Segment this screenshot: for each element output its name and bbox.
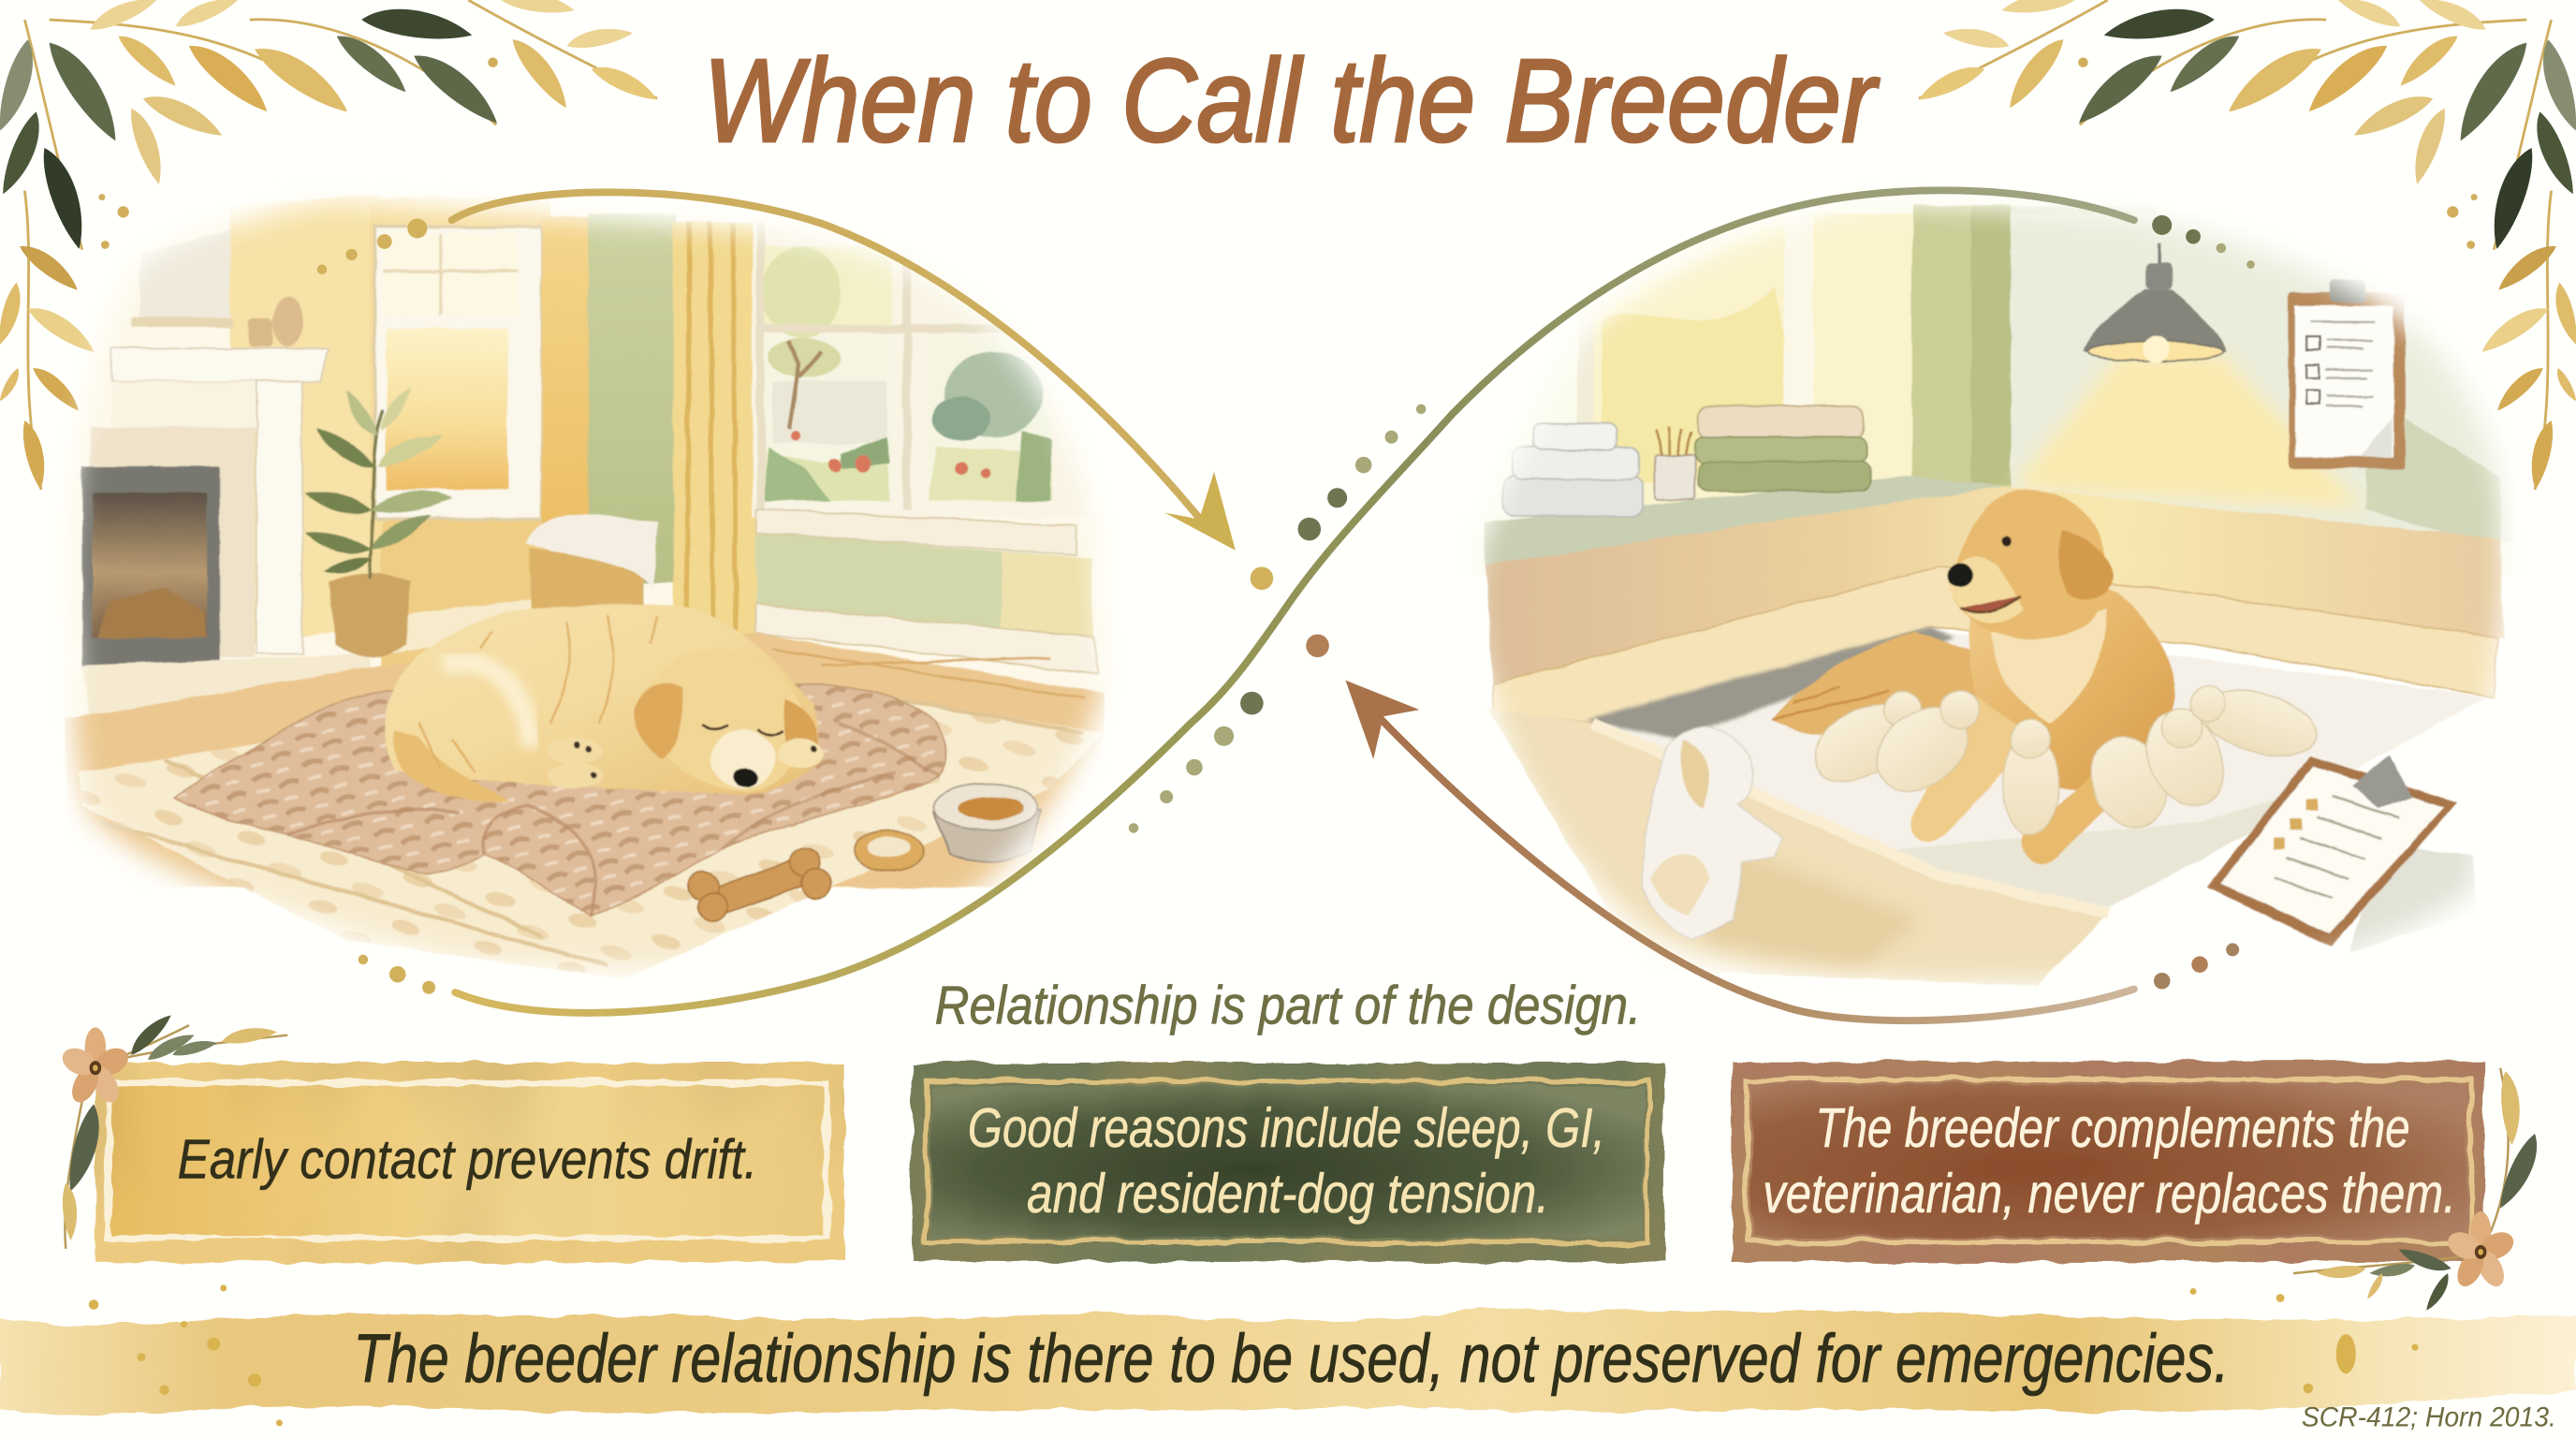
mother dog	[1773, 490, 2175, 864]
card text: Good reasons include sleep, GI,	[968, 1096, 1605, 1159]
fireplace	[82, 298, 370, 720]
window sill and green wainscot	[369, 509, 1097, 674]
food bowl	[933, 784, 1042, 862]
arrow: home to breeder gold arc	[452, 192, 1236, 550]
banner: key message	[0, 1284, 2576, 1426]
puppy collar bowl	[855, 831, 923, 871]
sprig and flower: right card corner	[2293, 1068, 2546, 1313]
potted plant	[302, 383, 454, 657]
rug	[79, 697, 1104, 979]
sleeping puppy	[385, 605, 823, 802]
title: When to Call the Breeder	[703, 35, 1881, 167]
decorative dots along the arcs	[317, 215, 2255, 994]
wall clipboard	[2289, 279, 2405, 468]
corner foliage: top right	[1914, 0, 2576, 491]
panel: whelping room with mother dog and puppies	[1462, 181, 2530, 986]
room walls	[1462, 181, 2530, 575]
floor	[66, 633, 1104, 888]
bedding floor	[1586, 627, 2487, 907]
card gold border	[1747, 1079, 2471, 1242]
heat lamp glow	[2012, 353, 2365, 509]
birth log clipboard	[2208, 756, 2478, 953]
card inner wash	[1751, 1084, 2466, 1238]
card text	[968, 1096, 1605, 1225]
box front wall	[1486, 707, 2110, 986]
card background	[912, 1064, 1664, 1262]
card background	[95, 1064, 844, 1262]
card inner wash	[111, 1086, 823, 1236]
card text: and resident-dog tension.	[1027, 1162, 1549, 1225]
card: early contact	[95, 1064, 844, 1262]
panel: calm home scene with sleeping puppy	[50, 181, 1134, 979]
hanging lamp	[2083, 243, 2226, 363]
gold flecks	[89, 1284, 2418, 1426]
card: complements the veterinarian	[1732, 1062, 2484, 1262]
knitted blanket	[176, 683, 946, 917]
card: good reasons	[912, 1064, 1664, 1262]
room walls	[50, 181, 1134, 723]
sprig and flower: left card corner	[60, 1009, 287, 1249]
arrow: breeder back to home brown arc	[1345, 681, 2134, 1020]
bone treat	[688, 848, 831, 922]
nursing puppies	[1801, 679, 2323, 838]
card gold border	[927, 1081, 1647, 1242]
laundry basket	[525, 513, 659, 609]
card text	[1763, 1096, 2456, 1225]
banner wash	[0, 1308, 2576, 1415]
shelf	[1484, 477, 2004, 568]
card background	[1732, 1062, 2484, 1262]
curtains	[542, 213, 755, 636]
puppy climbing the box	[1643, 727, 1782, 940]
card inner wash	[931, 1086, 1643, 1238]
subtitle: Relationship is part of the design.	[935, 976, 1641, 1035]
source citation: SCR-412; Horn 2013.	[2302, 1401, 2556, 1432]
garden window	[751, 223, 1053, 519]
left window	[374, 227, 542, 520]
card inner panel	[105, 1079, 829, 1240]
whelping box back wall	[1486, 486, 2504, 690]
box ledge	[1493, 566, 2497, 723]
corner foliage: top left	[0, 0, 662, 491]
card text: Early contact prevents drift.	[178, 1127, 757, 1190]
towel stacks	[1503, 405, 1869, 516]
arrow: crossing S-curve	[455, 190, 2134, 1013]
card text: The breeder complements the	[1815, 1096, 2410, 1159]
